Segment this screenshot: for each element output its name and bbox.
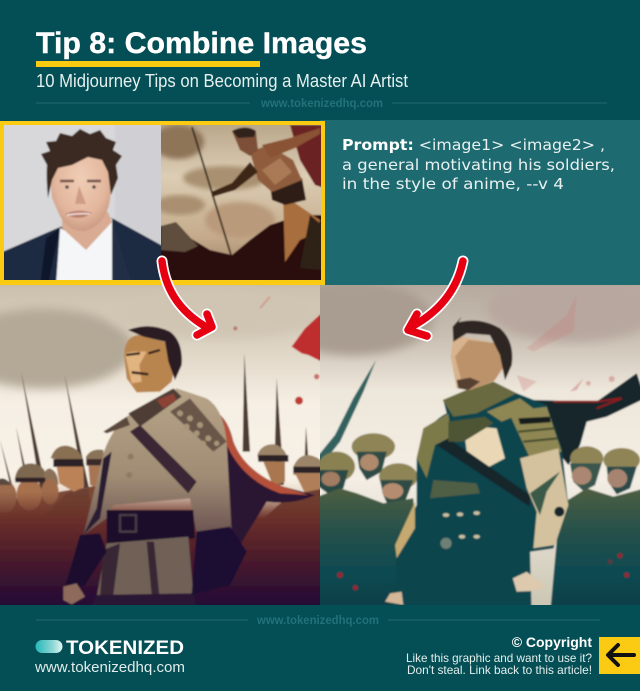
image: left generated general (0, 275, 330, 615)
arrow: right source to right result (408, 261, 463, 336)
red paint mist (517, 295, 615, 392)
prompt text: a general motivating his soldiers, (342, 156, 615, 174)
title underline (36, 61, 260, 67)
photo: Elon Musk portrait (4, 125, 161, 280)
spear (320, 360, 376, 464)
soldiers right (568, 445, 604, 464)
red paint splash (291, 314, 320, 362)
soldier body (395, 380, 568, 615)
prompt text: in the style of anime, --v 4 (342, 175, 564, 193)
logo wordmark: TOKENIZED (66, 637, 184, 659)
footer website url: www.tokenizedhq.com (34, 659, 185, 676)
general body (83, 388, 232, 535)
legs (283, 195, 320, 262)
subtitle: 10 Midjourney Tips on Becoming a Master AI Artist (36, 71, 408, 91)
skirt (270, 178, 306, 205)
red cape (290, 125, 321, 188)
panel: prompt band (320, 120, 640, 286)
prompt text (342, 136, 615, 193)
background soldiers left (0, 485, 96, 517)
photo: Spartan warrior with spear (161, 125, 321, 280)
copyright notice: Like this graphic and want to use it? (406, 651, 592, 665)
jacket (4, 218, 161, 280)
header website link: www.tokenizedhq.com (260, 96, 383, 110)
footer website link: www.tokenizedhq.com (256, 613, 379, 627)
ground (161, 214, 321, 280)
heading: title: Tip 8: Combine Images (36, 27, 367, 60)
prompt text: Prompt: <image1> <image2> , (342, 136, 605, 154)
spears (0, 353, 308, 512)
soldier head (451, 335, 503, 390)
background soldiers right (257, 444, 288, 462)
image: right generated soldier (320, 285, 640, 605)
arms (262, 128, 320, 158)
copyright notice: © Copyright (512, 634, 592, 650)
spear (192, 127, 231, 255)
face (50, 156, 112, 230)
copyright notice (406, 634, 592, 677)
tattered cape (533, 373, 640, 465)
soldiers left (318, 452, 355, 482)
cape (220, 416, 314, 544)
copyright notice: Don't steal. Link back to this article! (407, 663, 592, 677)
logo mark (36, 640, 63, 653)
arrow: left source to left result (162, 261, 212, 335)
icon: yellow back arrow (599, 637, 640, 674)
general head (124, 335, 175, 392)
hair (41, 129, 122, 198)
shirt (56, 218, 114, 285)
logo: Tokenized (36, 637, 184, 659)
head (232, 128, 258, 156)
neck (62, 212, 112, 250)
red specks (337, 553, 629, 590)
panel: source images frame (0, 115, 330, 290)
torso (250, 145, 302, 192)
foreground crowd (0, 494, 320, 605)
